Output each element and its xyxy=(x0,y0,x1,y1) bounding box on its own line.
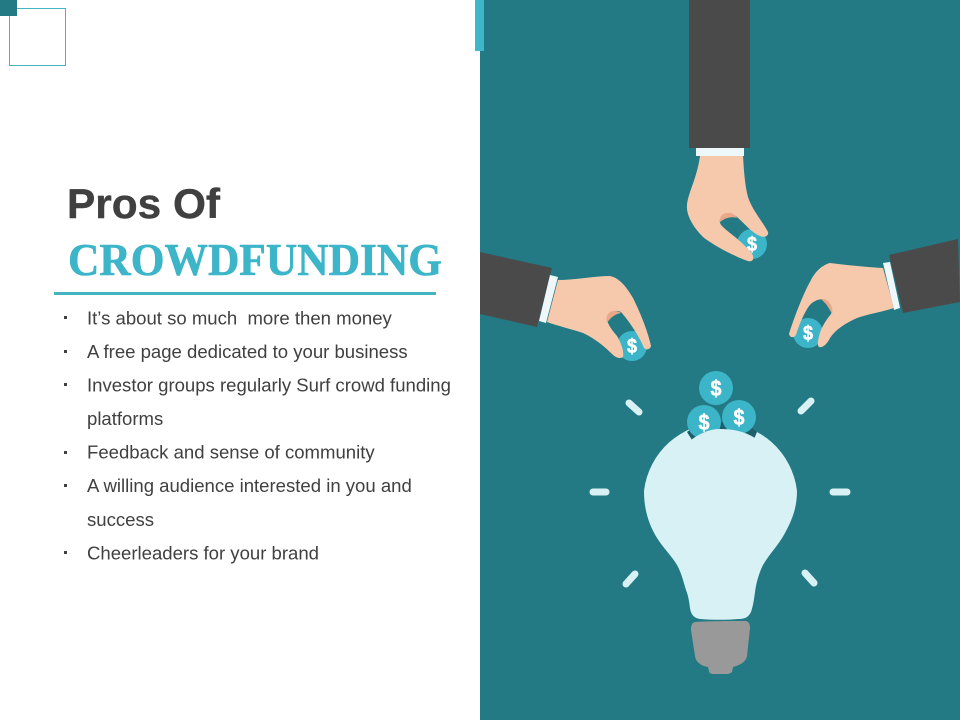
bullet list: Cheerleaders for your brand xyxy=(87,542,319,564)
illustration: light bulb xyxy=(593,371,847,674)
heading: Crowdfunding: CROWDFUNDING xyxy=(68,234,442,285)
bullet list: Feedback and sense of community xyxy=(87,442,375,462)
coin: top xyxy=(699,371,733,405)
accent tab xyxy=(475,0,484,51)
bullet list: A willing audience interested in you and xyxy=(87,475,412,496)
coin: right hand: $ xyxy=(803,323,813,345)
bullet list: success xyxy=(87,509,154,530)
panel: teal background xyxy=(480,0,960,720)
light rays xyxy=(593,401,847,584)
coin: top hand xyxy=(737,229,767,259)
bulb front cap xyxy=(685,429,760,470)
bullet list: Investor groups regularly Surf crowd funding xyxy=(87,374,451,396)
heading underline xyxy=(54,292,436,295)
bulb base xyxy=(691,621,750,674)
coin: left hand: $ xyxy=(627,336,637,358)
bulb glass xyxy=(644,423,797,620)
coin: left hand xyxy=(617,331,647,361)
heading: Pros Of: Pros Of xyxy=(67,180,221,227)
bullet list: platforms xyxy=(87,408,163,429)
bullet list: It’s about so much more then money xyxy=(87,308,393,328)
coin: lower right: $ xyxy=(734,405,744,430)
bullet list xyxy=(64,308,451,564)
illustration: right hand xyxy=(789,239,960,348)
coin: lower right xyxy=(722,400,756,434)
coin: right hand xyxy=(793,318,823,348)
coin: lower left xyxy=(687,405,721,439)
coin: lower left: $ xyxy=(698,410,710,435)
illustration: top hand xyxy=(687,0,768,261)
coin: top: $ xyxy=(710,376,722,401)
illustration: left hand xyxy=(480,252,651,361)
corner decoration xyxy=(0,0,66,66)
bulb slot xyxy=(687,422,757,440)
bullet list: A free page dedicated to your business xyxy=(87,341,408,362)
coin: top hand: $ xyxy=(747,234,757,256)
